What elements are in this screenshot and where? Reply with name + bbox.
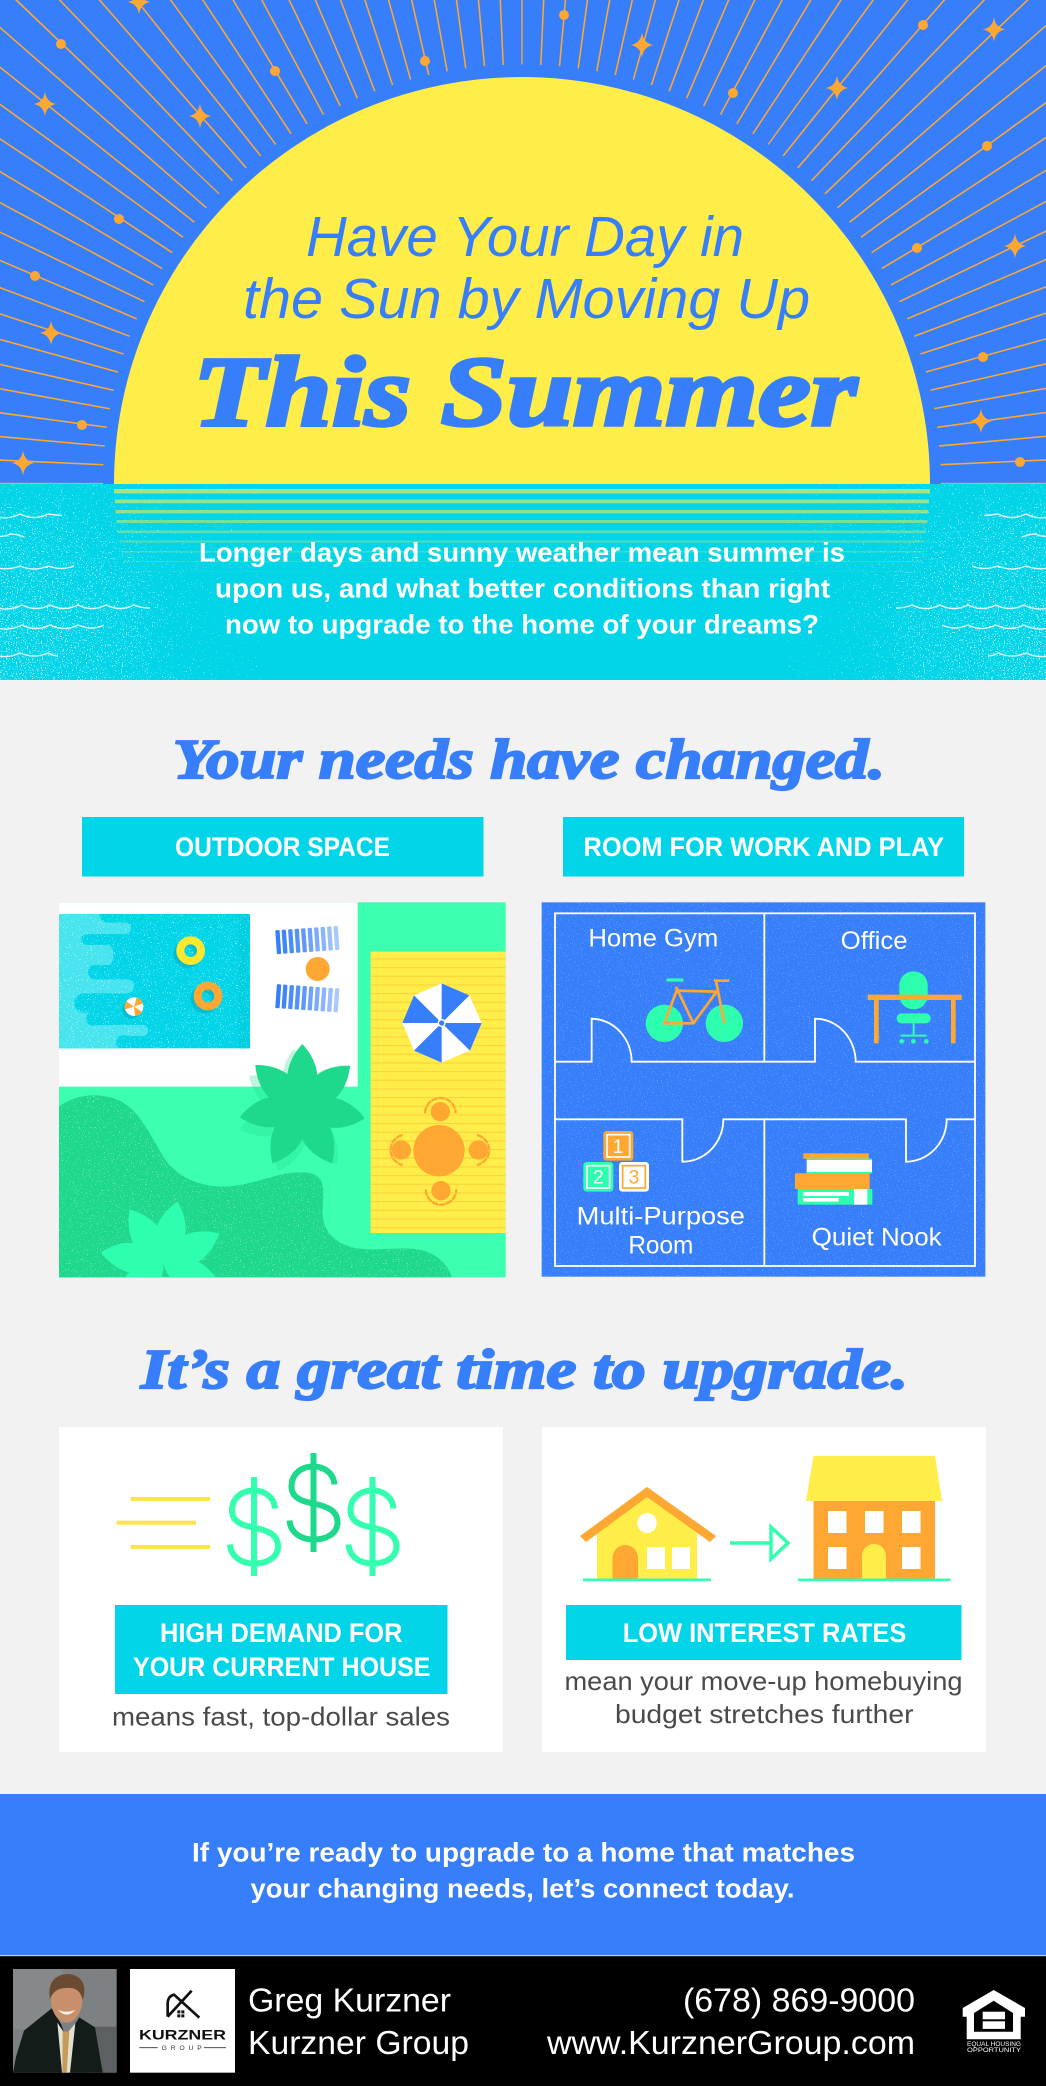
lower palm	[101, 1202, 220, 1278]
intro text: upon us, and what better conditions than right	[215, 574, 830, 604]
caption: means fast, top-dollar sales	[112, 1702, 450, 1732]
caption: budget stretches further	[615, 1699, 914, 1729]
ray dots	[30, 10, 1025, 467]
room labels: Quiet Nook	[812, 1224, 942, 1252]
agent photo	[13, 1969, 117, 2073]
label bar: YOUR CURRENT HOUSE	[133, 1652, 430, 1682]
agent name and company	[248, 1982, 469, 2061]
icon: stack of books	[795, 1153, 872, 1205]
hero sky with sun rays	[0, 0, 1046, 484]
label bar: LOW INTEREST RATES	[623, 1618, 906, 1648]
label bar: outdoor space: OUTDOOR SPACE	[175, 832, 390, 862]
label bar: room for work and play	[563, 817, 964, 876]
heading: your needs have changed: Your needs have changed.	[173, 729, 885, 791]
label bar	[566, 1605, 962, 1660]
card: high demand	[59, 1427, 503, 1752]
room labels: Room	[628, 1232, 693, 1260]
caption	[564, 1666, 962, 1729]
call to action band: your changing needs, let’s connect today.	[250, 1874, 794, 1904]
intro text: now to upgrade to the home of your dreams?	[225, 610, 819, 640]
call to action band	[0, 1794, 1046, 1955]
room labels: Home Gym	[588, 925, 718, 953]
company logo	[130, 1969, 235, 2073]
icon: roof K mark	[168, 1991, 199, 2018]
room labels: Multi-Purpose	[577, 1202, 745, 1230]
room labels: Office	[841, 927, 908, 955]
pool	[59, 914, 250, 1048]
contact details: (678) 869-9000	[683, 1982, 915, 2018]
agent name and company: Greg Kurzner	[248, 1982, 451, 2018]
label bar: room for work and play: ROOM FOR WORK AND PLAY	[584, 832, 944, 862]
room labels	[577, 925, 942, 1260]
call to action band: If you’re ready to upgrade to a home that matches	[192, 1838, 855, 1868]
floor plan walls	[555, 913, 975, 1266]
icon: equal housing opportunity: OPPORTUNITY	[967, 2047, 1022, 2054]
title: Have Your Day in	[306, 205, 744, 269]
icon: exercise bike	[646, 980, 743, 1042]
company logo: GROUP	[162, 2045, 202, 2052]
heading: great time to upgrade: It’s a great time to upgrade.	[140, 1339, 908, 1401]
lawn	[59, 1095, 452, 1277]
water band	[0, 484, 1046, 680]
footer bar	[0, 1955, 1046, 2086]
icon: large house	[798, 1456, 950, 1581]
contact details: www.KurznerGroup.com	[546, 2024, 915, 2061]
agent name and company: Kurzner Group	[248, 2024, 469, 2061]
sun reflection stripes	[114, 489, 930, 572]
intro text: Longer days and sunny weather mean summer is	[199, 538, 845, 568]
intro text	[199, 538, 845, 640]
deck	[371, 952, 506, 1233]
contact details	[546, 1982, 915, 2061]
upper palm	[229, 1041, 373, 1183]
sparkle stars	[12, 0, 1026, 476]
sun	[114, 77, 930, 484]
icon: speed lines and dollar signs	[116, 1453, 396, 1576]
icon: number blocks: 3	[629, 1168, 639, 1189]
panel: outdoor space	[59, 902, 506, 1316]
card: low interest rates	[542, 1427, 986, 1752]
caption: mean your move-up homebuying	[564, 1666, 962, 1696]
label bar	[115, 1605, 448, 1694]
icon: number blocks	[583, 1131, 649, 1192]
icon: equal housing opportunity	[963, 1990, 1025, 2054]
title: This Summer	[193, 336, 858, 447]
sun loungers	[275, 926, 339, 1012]
title	[193, 205, 858, 447]
umbrella	[402, 983, 482, 1063]
title: the Sun by Moving Up	[243, 267, 810, 331]
icon: desk and chair	[868, 971, 962, 1044]
company logo: KURZNER	[139, 2026, 226, 2042]
icon: small house	[580, 1487, 716, 1581]
patio table and chairs	[391, 1098, 489, 1205]
icon: number blocks: 2	[593, 1168, 604, 1189]
arrow	[730, 1527, 788, 1559]
label bar: outdoor space	[82, 817, 484, 876]
icon: equal housing opportunity: EQUAL HOUSING	[967, 2041, 1021, 2048]
panel: room for work and play	[542, 902, 985, 1277]
icon: number blocks: 1	[613, 1137, 623, 1158]
label bar: HIGH DEMAND FOR	[160, 1618, 402, 1648]
